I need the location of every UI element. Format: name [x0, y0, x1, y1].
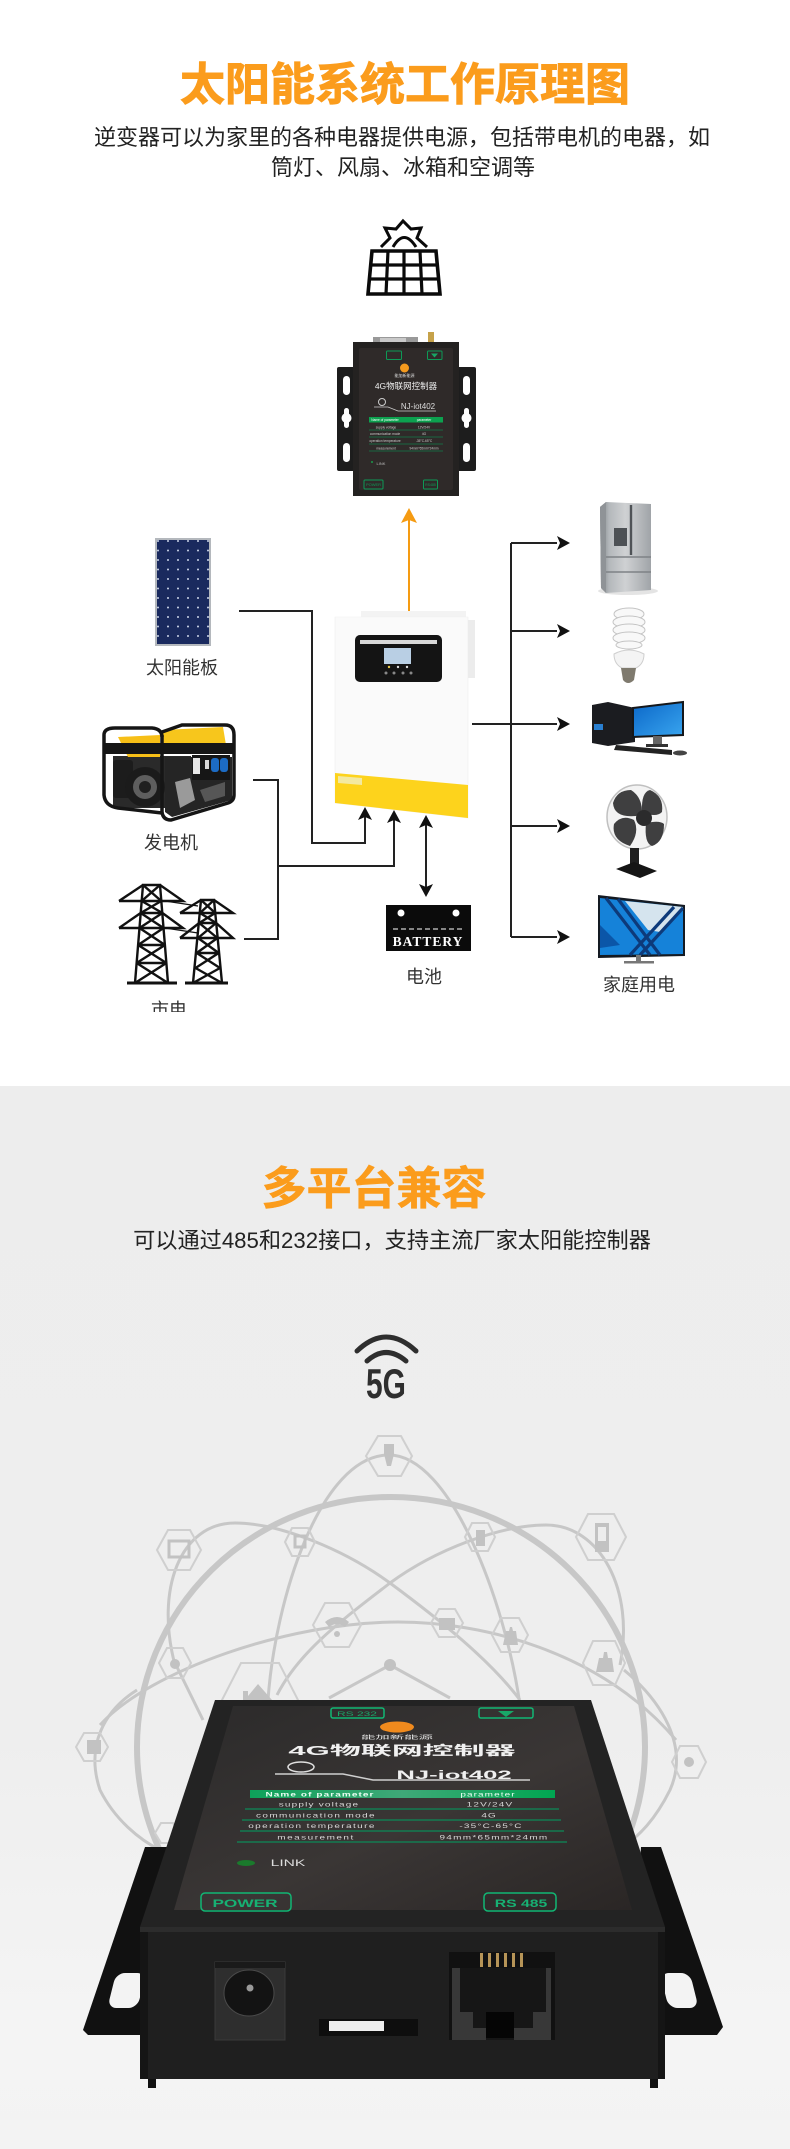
- parameter table: 12V/24V: [467, 1801, 513, 1808]
- ports and antenna: [373, 332, 434, 343]
- device printed labels: 94mm*65mm*24mm: [409, 446, 439, 450]
- parameter table: [237, 1790, 567, 1842]
- parameter table: parameter: [460, 1791, 516, 1798]
- top face inset panel: [174, 1706, 632, 1910]
- DC power jack: [215, 1962, 285, 2040]
- description text: [94, 125, 710, 180]
- device printed labels: RS485: [425, 483, 436, 487]
- parameter table: operation temperature: [248, 1822, 376, 1829]
- model line: NJ-iot402: [396, 1769, 512, 1782]
- label: mains grid (clipped): 市电: [151, 1000, 187, 1020]
- icon: battery: [386, 905, 471, 951]
- product title: 4G物联网控制器: [288, 1743, 516, 1758]
- parameter table: 4G: [481, 1812, 497, 1819]
- icon: solar panel: [155, 538, 211, 646]
- icon: refrigerator: [598, 502, 658, 595]
- printed panel labels: [201, 1708, 567, 1911]
- inverter display: [355, 635, 442, 682]
- device printed labels: operation temperature: [369, 439, 401, 443]
- parameter table: -35°C-65°C: [459, 1822, 523, 1829]
- parameter table: Name of parameter: [265, 1791, 375, 1798]
- device printed labels: 12V/24V: [418, 426, 431, 430]
- device printed labels: LINK: [377, 461, 386, 466]
- device printed labels: Name of parameter: [371, 418, 400, 422]
- RJ45 port: [449, 1952, 555, 2040]
- device printed labels: 能加新能源: [394, 372, 414, 378]
- parameter table: supply voltage: [279, 1801, 359, 1808]
- printed panel labels: 能加新能源: [361, 1734, 433, 1740]
- arrow: orange inverter to controller: [401, 508, 417, 611]
- front face: [140, 1927, 665, 2088]
- port tags: [201, 1708, 556, 1911]
- icon: battery: BATTERY: [393, 934, 463, 949]
- device printed labels: communication mode: [370, 432, 400, 436]
- parameter table: communication mode: [256, 1812, 376, 1819]
- device printed labels: POWER: [366, 482, 381, 487]
- network node icons: [87, 1444, 694, 1767]
- device printed labels: measurement: [376, 446, 396, 450]
- device printed labels: NJ-iot402: [401, 402, 436, 411]
- icon: desktop computer: [592, 702, 687, 756]
- parameter table: 94mm*65mm*24mm: [439, 1834, 549, 1841]
- parameter table: measurement: [277, 1834, 355, 1841]
- connector: inverter output to home appliances: [472, 536, 570, 944]
- description text: 筒灯、风扇、冰箱和空调等: [271, 155, 535, 180]
- icon: solar panel with sun: [368, 221, 440, 294]
- link indicator: [237, 1858, 306, 1868]
- panel: white working principle section: [95, 60, 708, 1012]
- icon: electric fan: [607, 785, 667, 878]
- printed panel labels: RS 232: [337, 1711, 377, 1718]
- device printed labels: supply voltage: [376, 426, 396, 430]
- reset slot: [319, 2019, 418, 2036]
- label: generator: 发电机: [144, 833, 198, 853]
- device printed labels: parameter: [417, 418, 432, 422]
- panel: grey compatibility section: [0, 1086, 790, 2149]
- device printed labels: [364, 351, 443, 489]
- network globe background graphic: [76, 1436, 706, 1997]
- label: battery: 电池: [406, 967, 442, 987]
- arrow: inverter to battery bidirectional: [419, 815, 433, 897]
- icon: 5G signal: [357, 1337, 416, 1407]
- heading: 多平台兼容: [261, 1163, 487, 1214]
- connector: generator and grid to inverter: [244, 780, 401, 939]
- description text: 可以通过485和232接口，支持主流厂家太阳能控制器: [133, 1228, 651, 1253]
- network hexagon nodes: [76, 1436, 706, 1843]
- description text: 逆变器可以为家里的各种电器提供电源，包括带电机的电器，如: [94, 125, 710, 150]
- device: controller perspective view: [83, 1700, 723, 2088]
- icon: light bulb: [613, 608, 645, 683]
- icon: 5G signal: 5G: [366, 1360, 406, 1407]
- label: home appliances: 家庭用电: [603, 975, 675, 995]
- device: controller top view: [337, 332, 476, 496]
- link indicator: LINK: [271, 1858, 306, 1868]
- icon: television: [598, 895, 685, 964]
- mounting flanges: [83, 1847, 723, 2035]
- device: hybrid inverter: [335, 611, 475, 818]
- device printed labels: 4G物联网控制器: [375, 381, 438, 391]
- device printed labels: 4G: [422, 432, 427, 436]
- top face: [140, 1700, 665, 1927]
- device body: [353, 342, 459, 496]
- icon: power transmission towers: [119, 885, 233, 983]
- model line: [275, 1762, 530, 1782]
- printed panel labels: RS 485: [495, 1897, 548, 1909]
- connector: solar panel to inverter: [239, 611, 372, 843]
- title: 太阳能系统工作原理图: [180, 59, 630, 110]
- printed panel labels: POWER: [212, 1898, 278, 1910]
- label: solar panel: 太阳能板: [146, 658, 218, 678]
- mounting flanges: [337, 367, 476, 471]
- logo: [380, 1722, 414, 1732]
- icon: generator: [104, 725, 234, 820]
- device printed labels: -35°C-65°C: [416, 439, 433, 443]
